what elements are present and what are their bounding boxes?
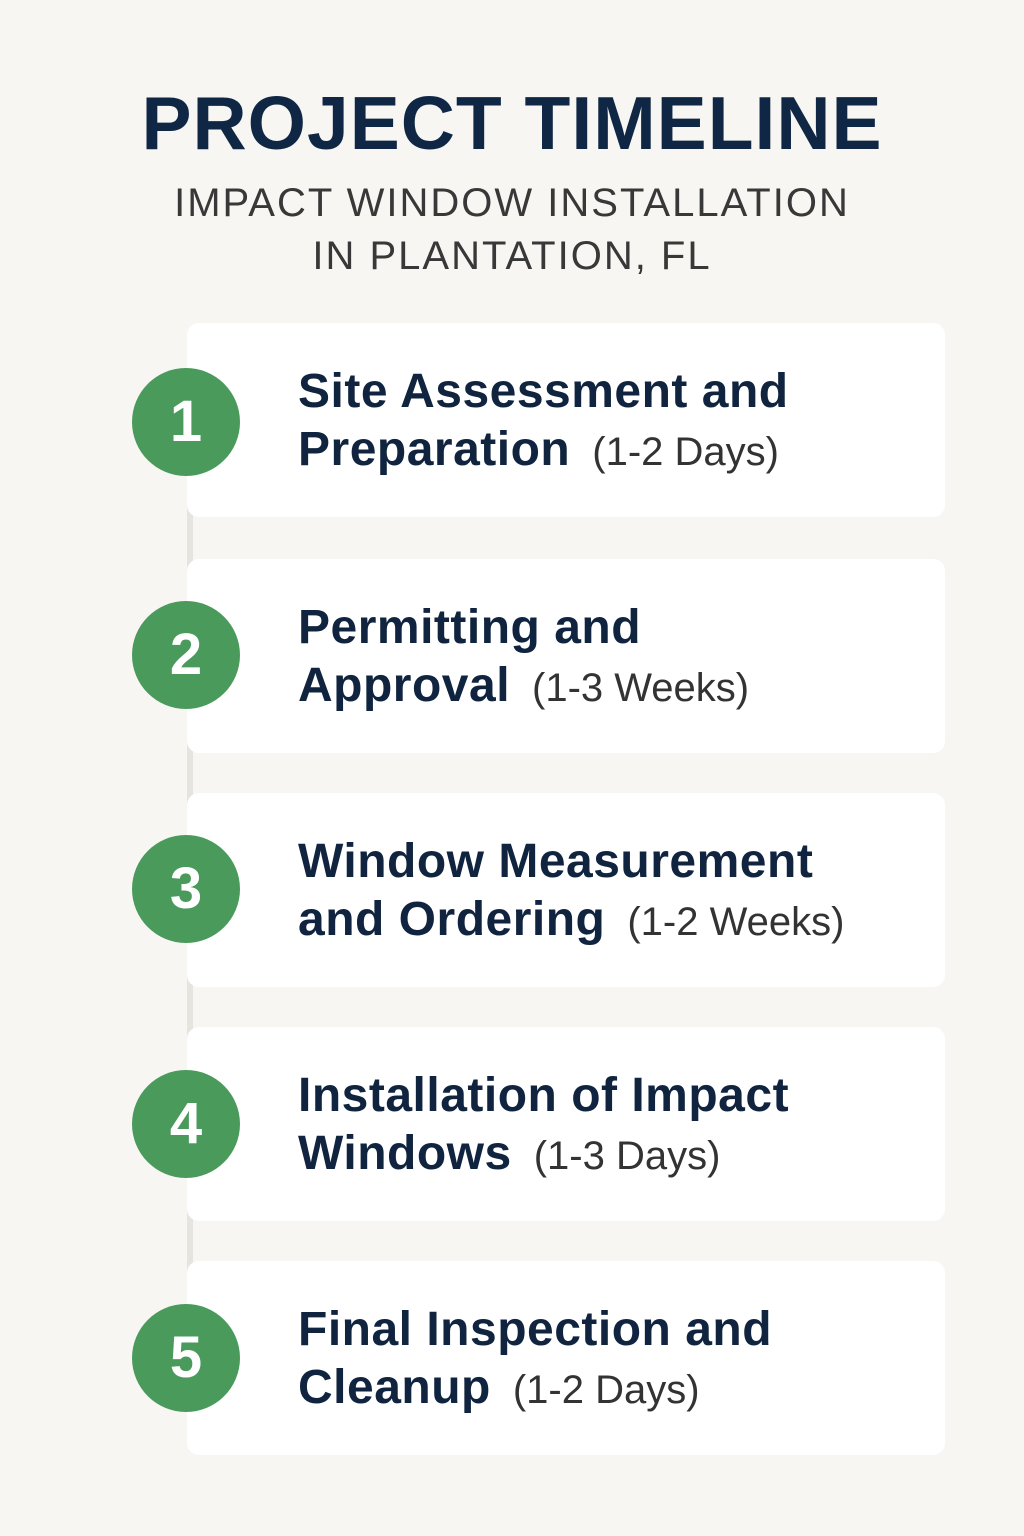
subtitle: IMPACT WINDOW INSTALLATION (174, 181, 850, 225)
icon: step 1 circle: 1 (170, 389, 202, 454)
step 4 text (298, 1069, 789, 1180)
title: PROJECT TIMELINE (141, 81, 883, 165)
subtitle: IN PLANTATION, FL (312, 234, 712, 278)
step 2 text: Approval (1-3 Weeks) (298, 659, 749, 712)
step 3 text: Window Measurement (298, 835, 813, 888)
step 2 text: Permitting and (298, 601, 641, 654)
step 4 text: Installation of Impact (298, 1069, 789, 1122)
icon: step 3 circle: 3 (170, 856, 202, 921)
step 1 text (298, 365, 789, 476)
card: step 2 (187, 559, 945, 753)
step 3 text: and Ordering (1-2 Weeks) (298, 893, 844, 946)
card: step 5 (187, 1261, 945, 1455)
icon: step 3 circle (132, 835, 240, 943)
card: step 4 (187, 1027, 945, 1221)
icon: step 5 circle (132, 1304, 240, 1412)
step 5 text: Cleanup (1-2 Days) (298, 1361, 700, 1414)
icon: step 4 circle: 4 (170, 1091, 202, 1156)
icon: step 2 circle (132, 601, 240, 709)
icon: step 2 circle: 2 (170, 622, 202, 687)
card: step 3 (187, 793, 945, 987)
icon: step 5 circle: 5 (170, 1325, 202, 1390)
icon: step 1 circle (132, 368, 240, 476)
icon: step 4 circle (132, 1070, 240, 1178)
subtitle (174, 181, 850, 278)
step 3 text (298, 835, 844, 946)
card: step 1 (187, 323, 945, 517)
step 1 text: Site Assessment and (298, 365, 789, 418)
step 2 text (298, 601, 749, 712)
step 5 text: Final Inspection and (298, 1303, 772, 1356)
step 1 text: Preparation (1-2 Days) (298, 423, 779, 476)
step 5 text (298, 1303, 772, 1414)
step 4 text: Windows (1-3 Days) (298, 1127, 720, 1180)
